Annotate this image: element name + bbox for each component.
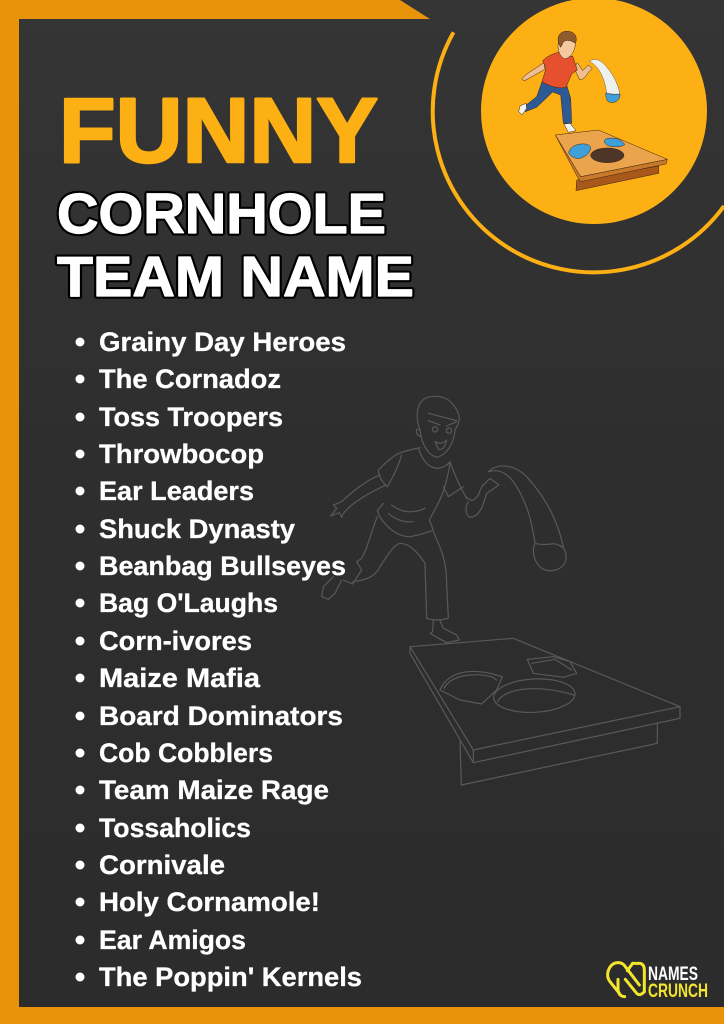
icon: N mark	[608, 963, 644, 997]
icon: cornhole player and board	[519, 31, 667, 191]
list items: Holy Cornamole!	[99, 887, 320, 917]
heading: FUNNY: FUNNY	[59, 80, 378, 182]
heading: TEAM NAME black outline: TEAM NAME	[57, 245, 414, 309]
heading: CORNHOLE black outline: CORNHOLE	[57, 182, 386, 246]
list items: Team Maize Rage	[99, 775, 329, 805]
illustration circle	[481, 0, 707, 224]
accent ring	[433, 32, 724, 272]
list items: Tossaholics	[99, 813, 251, 843]
list of team names	[76, 327, 362, 992]
list items: Board Dominators	[99, 701, 343, 731]
list items: Bag O'Laughs	[99, 588, 278, 618]
logo wordmark: NAMES: NAMES	[648, 964, 698, 985]
list items: Maize Mafia	[99, 663, 261, 693]
title	[57, 80, 414, 309]
ghost illustration: player and board outline	[322, 396, 680, 785]
list items: Cob Cobblers	[99, 738, 273, 768]
heading: CORNHOLE: CORNHOLE	[57, 182, 386, 246]
list items: The Poppin' Kernels	[99, 962, 362, 992]
list items: Grainy Day Heroes	[99, 327, 346, 357]
list items: Throwbocop	[99, 439, 264, 469]
list items: Ear Amigos	[99, 925, 246, 955]
logo: Names Crunch	[608, 963, 708, 1002]
list items: Toss Troopers	[99, 402, 283, 432]
list items: Ear Leaders	[99, 476, 254, 506]
list items: Corn-ivores	[99, 626, 252, 656]
list items: Shuck Dynasty	[99, 514, 295, 544]
list items: The Cornadoz	[99, 364, 281, 394]
list items: Cornivale	[99, 850, 225, 880]
list items: Beanbag Bullseyes	[99, 551, 346, 581]
heading: TEAM NAME: TEAM NAME	[57, 245, 414, 309]
list items	[99, 327, 362, 992]
list bullets	[76, 338, 84, 982]
